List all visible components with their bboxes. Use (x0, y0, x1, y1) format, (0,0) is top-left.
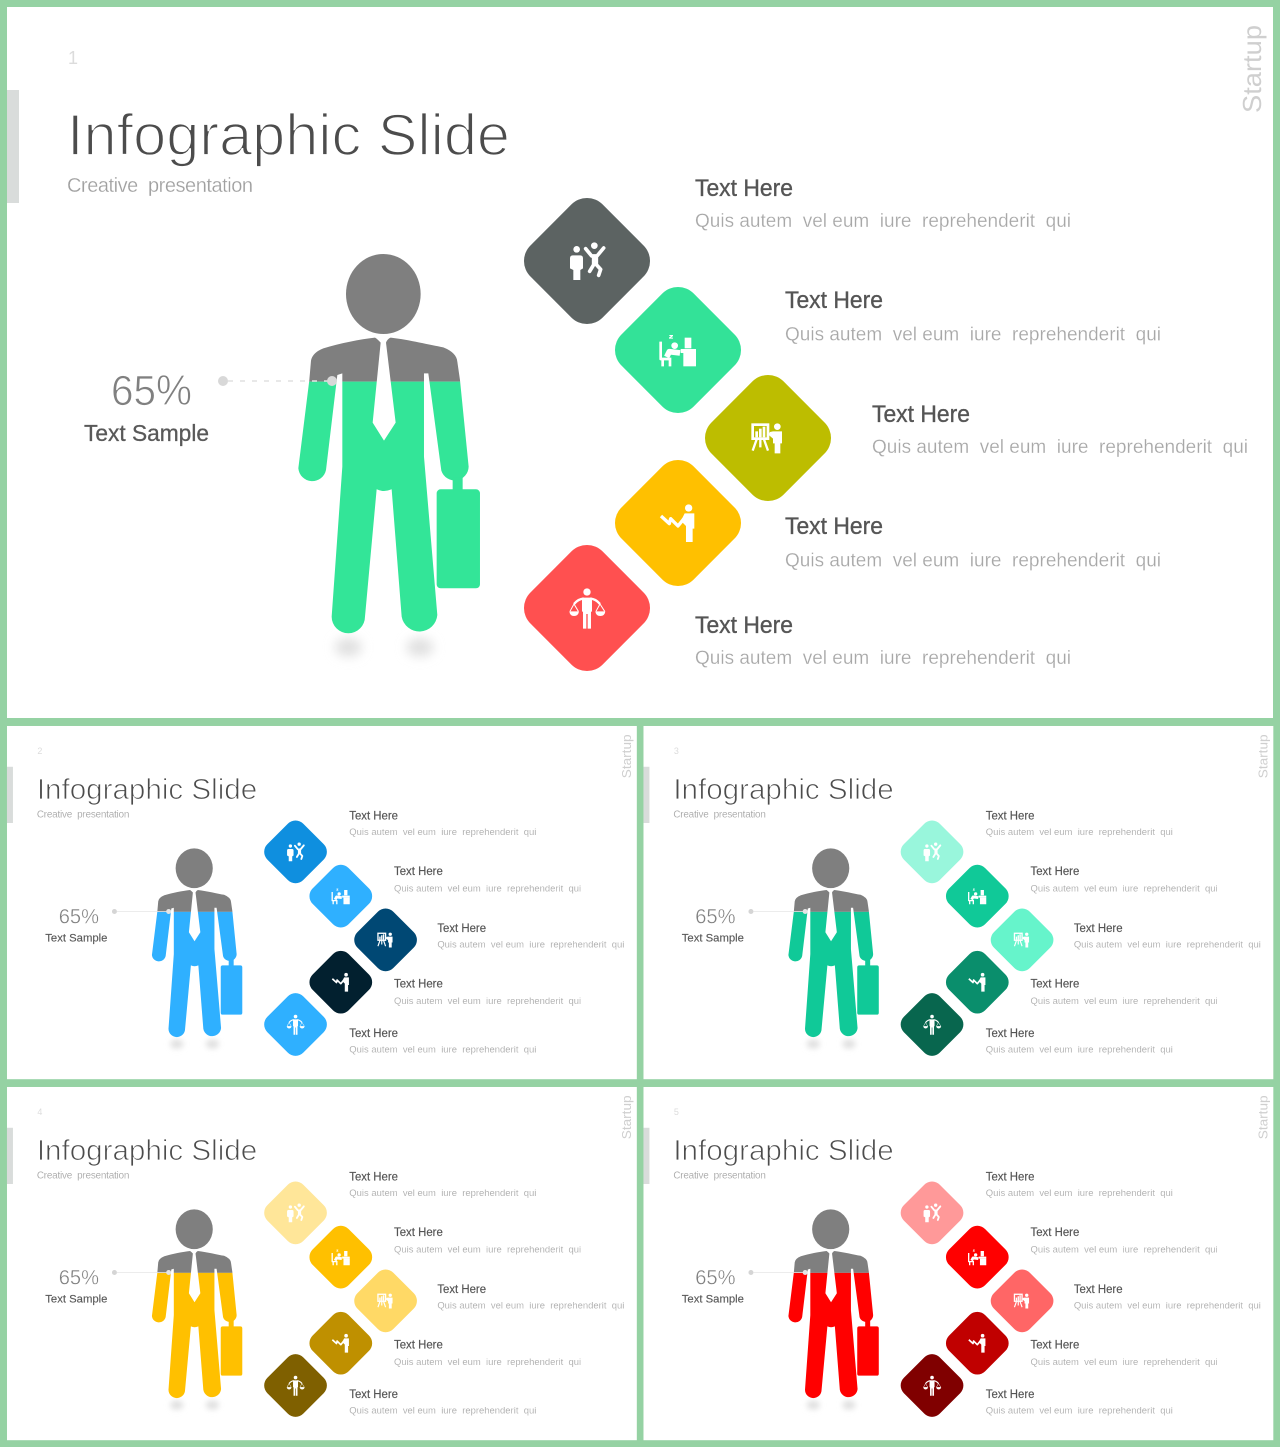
item 2: Text Here (394, 1225, 443, 1239)
item 3: Quis autem vel eum iure reprehenderit qui (437, 939, 624, 950)
item 5: Quis autem vel eum iure reprehenderit qui (695, 648, 1071, 669)
item 4 (941, 1307, 1218, 1379)
item 2: Text Here (1031, 864, 1080, 878)
item 4 (305, 1307, 581, 1379)
item 4 (941, 946, 1218, 1018)
title: Infographic Slide (673, 1135, 894, 1167)
side accent bar (7, 90, 19, 203)
item 3: Quis autem vel eum iure reprehenderit qui (437, 1300, 624, 1311)
item 2 (305, 1221, 581, 1293)
item 5: Text Here (986, 1026, 1035, 1040)
title: Infographic Slide (37, 1135, 257, 1167)
item 4 (606, 451, 1161, 595)
percentage callout: Text Sample (45, 1293, 107, 1305)
item 3: Quis autem vel eum iure reprehenderit qui (1074, 939, 1261, 950)
item 2: Quis autem vel eum iure reprehenderit qui (785, 324, 1161, 346)
slide 3: teal variant: 3 (674, 746, 679, 756)
percentage callout: Text Sample (84, 420, 209, 446)
slide 2: blue variant (7, 726, 637, 1079)
subtitle: Creative presentation (673, 1171, 766, 1182)
item 5: Quis autem vel eum iure reprehenderit qui (986, 1044, 1173, 1055)
slide 4: amber variant (7, 1087, 637, 1440)
percentage callout (45, 904, 171, 944)
subtitle: Creative presentation (67, 175, 253, 197)
item 1 (896, 1170, 1173, 1249)
item 2: Text Here (1031, 1225, 1080, 1239)
item 3 (696, 366, 1248, 510)
item 2: Quis autem vel eum iure reprehenderit qui (394, 1244, 581, 1255)
slide 3: teal variant (643, 726, 1273, 1079)
item 4 (305, 946, 581, 1018)
subtitle: Creative presentation (37, 1171, 129, 1182)
item 2 (941, 1221, 1218, 1293)
percentage callout (45, 1265, 171, 1305)
item 4: Quis autem vel eum iure reprehenderit qui (1031, 1357, 1218, 1368)
item 1: Quis autem vel eum iure reprehenderit qui (695, 211, 1071, 232)
item 4: Text Here (1031, 1338, 1080, 1352)
item 4: Quis autem vel eum iure reprehenderit qui (394, 1357, 581, 1368)
figure: businessman fill chart (298, 254, 480, 657)
item 2 (305, 860, 581, 932)
vertical label: Startup (1255, 734, 1270, 778)
item 5 (515, 536, 1071, 680)
vertical label: Startup (1255, 1095, 1270, 1139)
item 5: Quis autem vel eum iure reprehenderit qui (986, 1405, 1173, 1416)
percentage callout: Text Sample (682, 932, 744, 944)
item 5: Text Here (986, 1387, 1035, 1401)
item 4: Text Here (394, 1338, 443, 1352)
item 5: Quis autem vel eum iure reprehenderit qui (349, 1405, 536, 1416)
slide 2: blue variant: 2 (37, 746, 42, 756)
item 3: Text Here (1074, 1282, 1123, 1296)
percentage callout: 65% (695, 1265, 736, 1289)
item 1: Quis autem vel eum iure reprehenderit qui (349, 1188, 536, 1199)
percentage callout: Text Sample (682, 1293, 744, 1305)
percentage callout: 65% (695, 904, 736, 928)
vertical label: Startup (619, 734, 634, 778)
slide 5: red variant: 5 (674, 1107, 679, 1117)
item 4: Quis autem vel eum iure reprehenderit qui (394, 996, 581, 1007)
slide 5: red variant (643, 1087, 1273, 1440)
item 5 (896, 989, 1173, 1060)
percentage callout (682, 904, 808, 944)
subtitle: Creative presentation (673, 810, 766, 821)
item 1: Text Here (695, 175, 793, 202)
slide 4: amber variant: 4 (37, 1107, 42, 1117)
item 4: Text Here (394, 977, 443, 991)
percentage callout: 65% (59, 1265, 99, 1289)
item 2 (941, 860, 1218, 932)
title: Infographic Slide (673, 774, 894, 806)
vertical label: Startup (1237, 25, 1267, 113)
item 1: Quis autem vel eum iure reprehenderit qui (986, 827, 1173, 838)
item 1: Text Here (349, 1170, 398, 1184)
item 1: Text Here (986, 1170, 1035, 1184)
item 1: Text Here (986, 809, 1035, 823)
item 2: Text Here (785, 287, 883, 314)
item 3: Text Here (1074, 921, 1123, 935)
item 2: Quis autem vel eum iure reprehenderit qui (1031, 1244, 1218, 1255)
percentage callout: 65% (111, 367, 192, 415)
item 3: Quis autem vel eum iure reprehenderit qui (872, 437, 1248, 458)
item 5: Text Here (349, 1026, 398, 1040)
item 3: Text Here (437, 1282, 486, 1296)
item 3: Text Here (437, 921, 486, 935)
item 1: Text Here (349, 809, 398, 823)
item 1: Quis autem vel eum iure reprehenderit qui (986, 1188, 1173, 1199)
item 4: Quis autem vel eum iure reprehenderit qui (1031, 996, 1218, 1007)
item 5: Text Here (695, 612, 793, 639)
item 3: Quis autem vel eum iure reprehenderit qui (1074, 1300, 1261, 1311)
vertical label: Startup (619, 1095, 634, 1139)
item 2: Quis autem vel eum iure reprehenderit qui (1031, 883, 1218, 894)
item 2: Text Here (394, 864, 443, 878)
item 2 (606, 278, 1161, 422)
item 2: Quis autem vel eum iure reprehenderit qui (394, 883, 581, 894)
item 4: Quis autem vel eum iure reprehenderit qui (785, 550, 1161, 572)
percentage callout (84, 367, 337, 446)
item 5: Quis autem vel eum iure reprehenderit qui (349, 1044, 536, 1055)
figure: businessman fill chart (152, 848, 242, 1049)
figure: businessman fill chart (152, 1209, 242, 1410)
item 3 (986, 1265, 1261, 1337)
title: Infographic Slide (67, 103, 510, 168)
subtitle: Creative presentation (37, 810, 129, 821)
percentage callout (682, 1265, 808, 1305)
item 3 (350, 1265, 624, 1337)
item 1 (515, 175, 1071, 333)
percentage callout: 65% (59, 904, 99, 928)
item 5 (260, 1350, 536, 1421)
slide 1: main slide (7, 7, 1273, 718)
item 1: Quis autem vel eum iure reprehenderit qui (349, 827, 536, 838)
figure: businessman fill chart (788, 848, 879, 1049)
item 5 (896, 1350, 1173, 1421)
percentage callout: Text Sample (45, 932, 107, 944)
item 3 (350, 904, 624, 976)
item 3: Text Here (872, 401, 970, 428)
page number: 1 (68, 48, 78, 68)
item 1 (260, 809, 536, 888)
figure: businessman fill chart (788, 1209, 879, 1410)
item 4: Text Here (785, 513, 883, 540)
item 1 (260, 1170, 536, 1249)
item 5 (260, 989, 536, 1060)
item 5: Text Here (349, 1387, 398, 1401)
item 3 (986, 904, 1261, 976)
item 4: Text Here (1031, 977, 1080, 991)
title: Infographic Slide (37, 774, 257, 806)
item 1 (896, 809, 1173, 888)
